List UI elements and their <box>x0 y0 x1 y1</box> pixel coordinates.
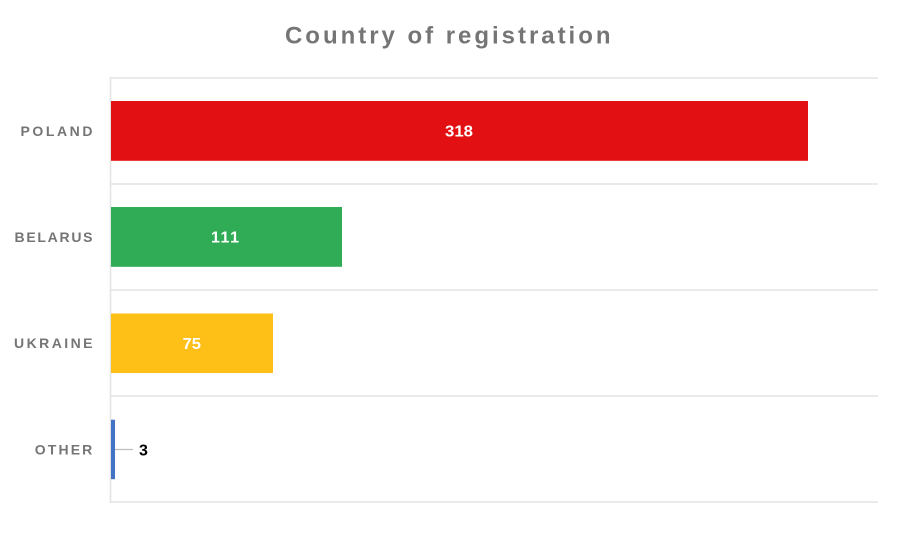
category labels: UKRAINE <box>14 335 92 351</box>
category labels: OTHER <box>35 442 92 458</box>
bar: Belarus 111 <box>111 207 342 267</box>
title: Country of registration <box>285 22 610 50</box>
category labels: POLAND <box>20 123 92 139</box>
bar: Other 3: 3 <box>139 442 148 460</box>
bar: Other 3 <box>111 420 148 479</box>
bar: Poland 318: 318 <box>445 124 473 140</box>
bar: Belarus 111: 111 <box>211 230 239 246</box>
category labels: BELARUS <box>14 229 92 245</box>
bar: Ukraine 75 <box>111 314 273 373</box>
category labels <box>14 123 92 458</box>
bar: Ukraine 75: 75 <box>182 336 201 353</box>
bar: Poland 318 <box>111 101 808 161</box>
